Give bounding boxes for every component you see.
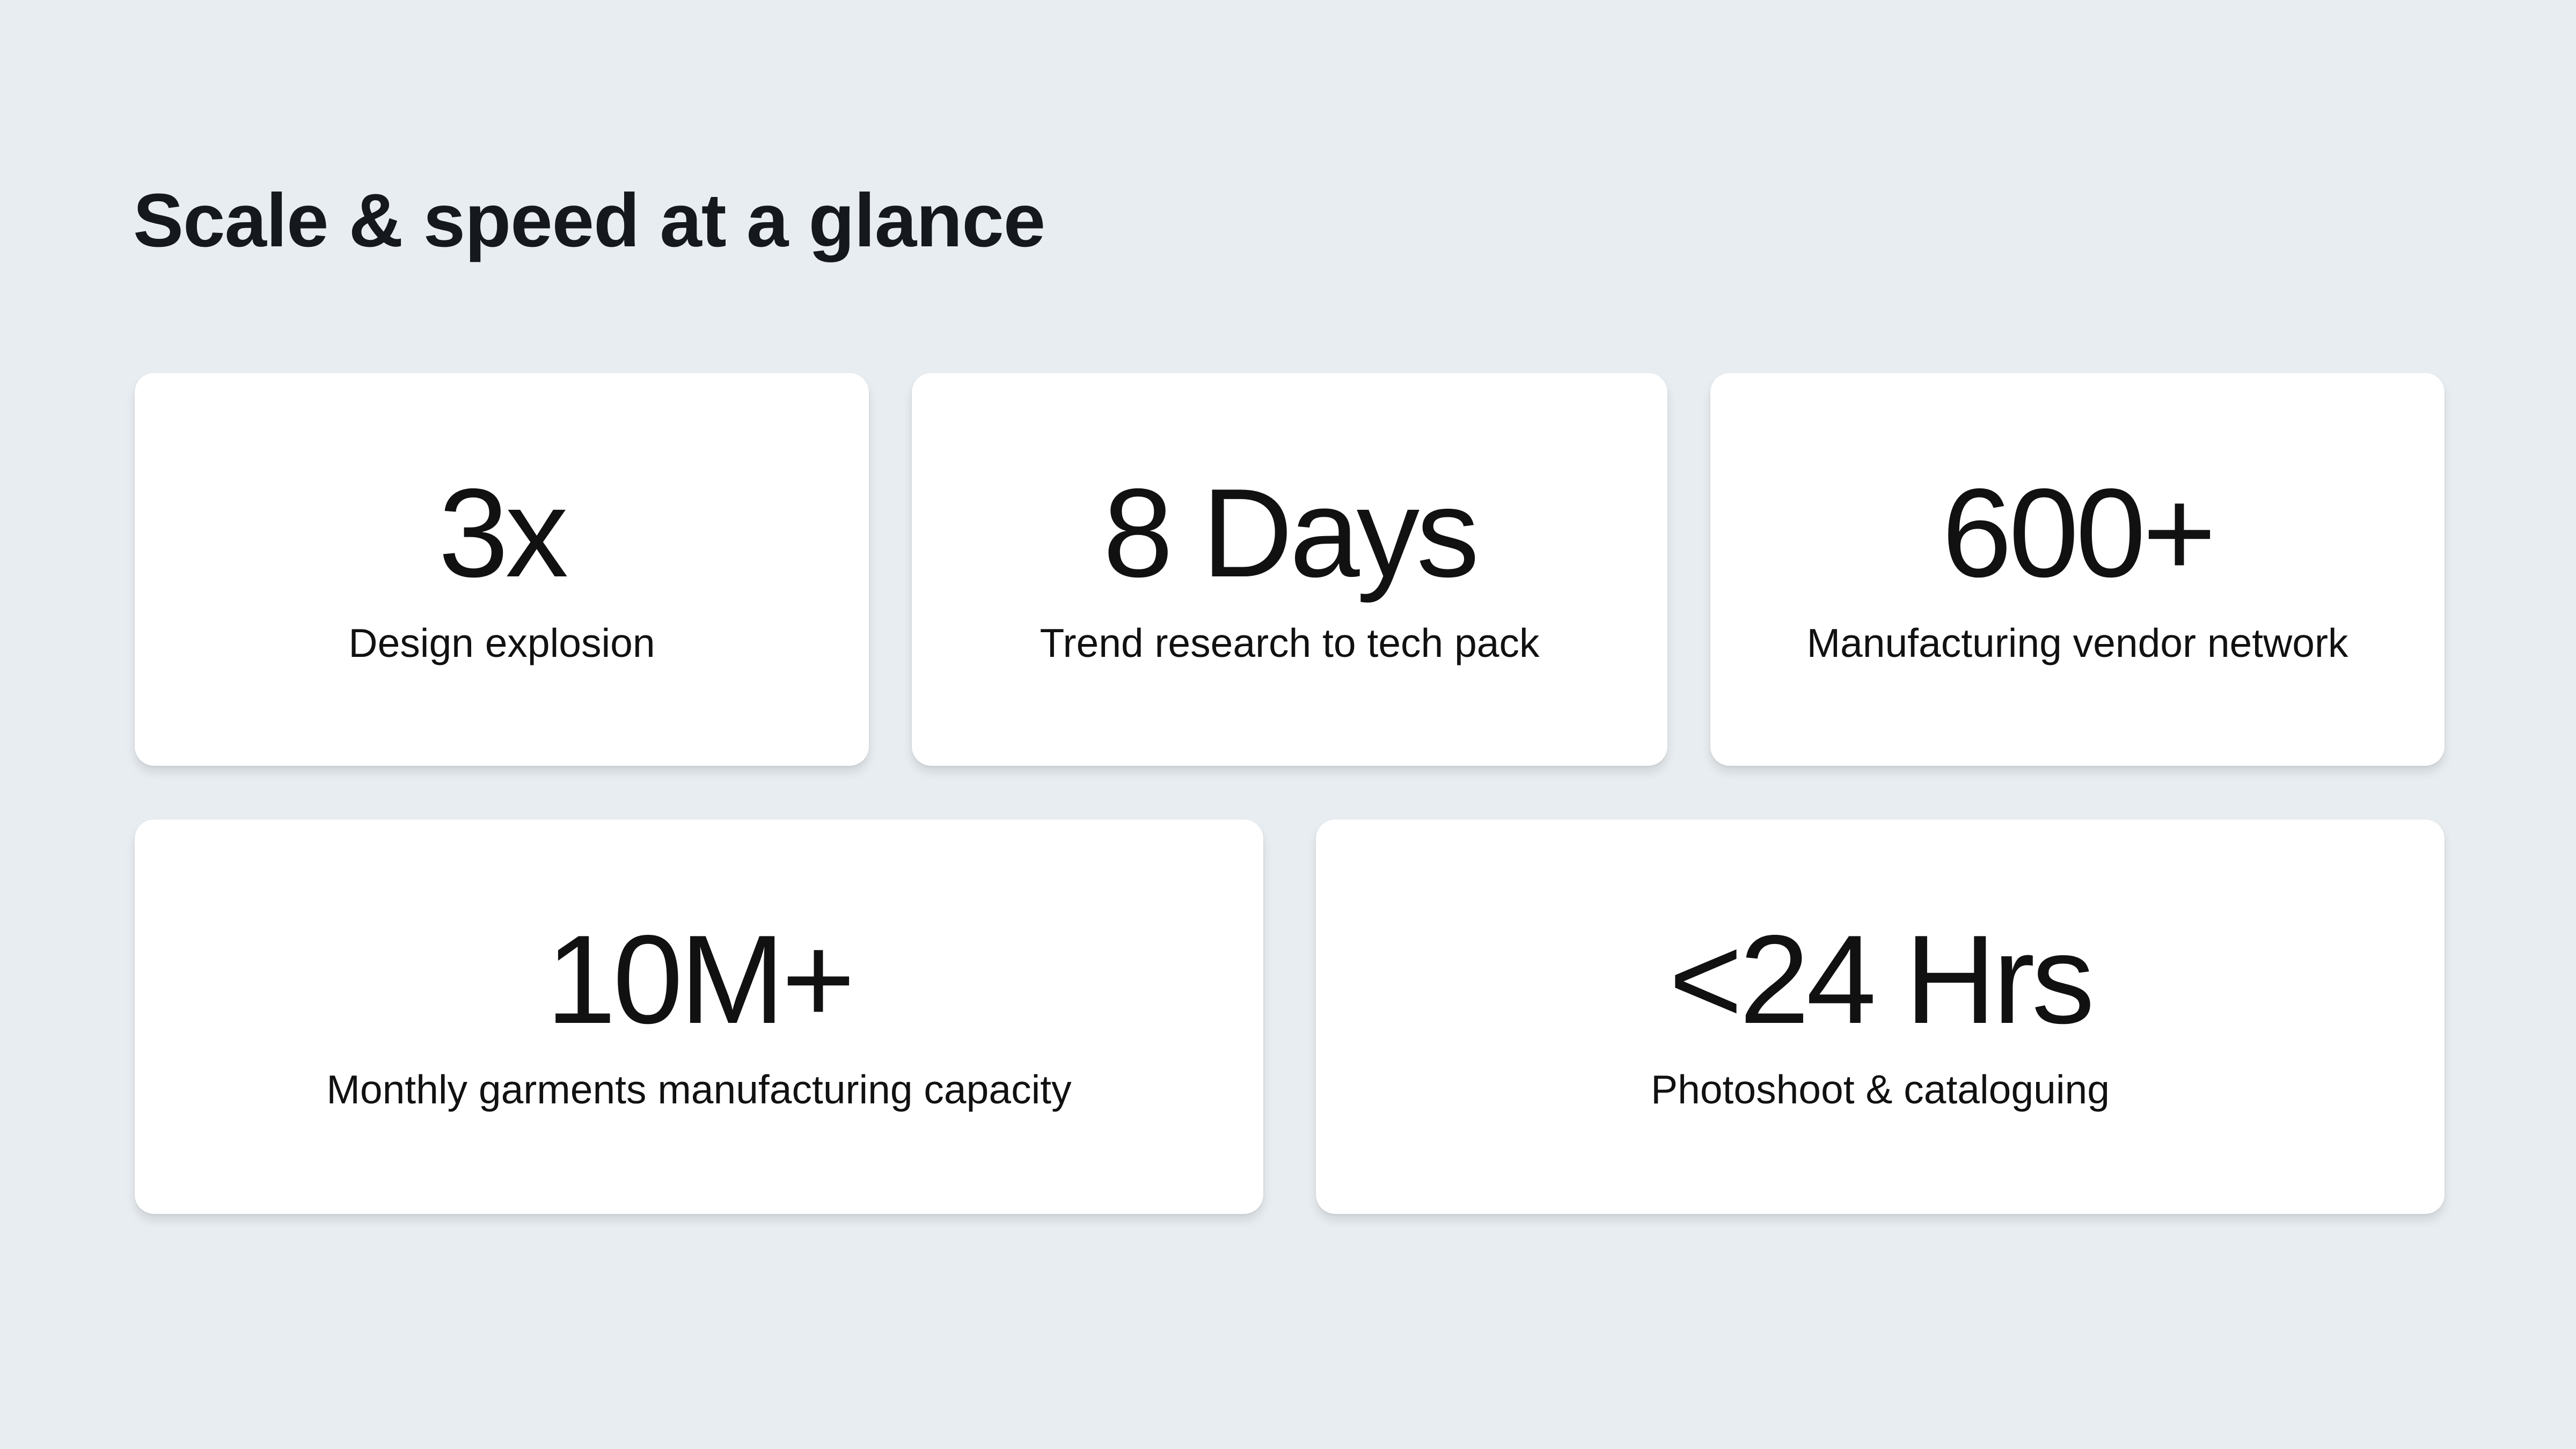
- stat number: 3x: [438, 462, 565, 603]
- stat number: 10M+: [546, 909, 852, 1050]
- card: 8 days: [912, 373, 1667, 766]
- card: 10M+: [135, 819, 1263, 1214]
- stat label: Design explosion: [348, 620, 655, 665]
- stat label: Monthly garments manufacturing capacity: [326, 1067, 1072, 1112]
- stat number: 8 Days: [1103, 462, 1476, 603]
- card: 600+: [1710, 373, 2445, 766]
- stat label: Photoshoot & cataloguing: [1651, 1067, 2110, 1112]
- card: 3x design explosion: [135, 373, 869, 766]
- stat label: Manufacturing vendor network: [1807, 620, 2348, 665]
- card: <24 hrs: [1316, 819, 2445, 1214]
- title: Scale & speed at a glance: [133, 178, 1045, 262]
- stat label: Trend research to tech pack: [1040, 620, 1540, 665]
- stat number: 600+: [1942, 462, 2213, 603]
- stat number: <24 Hrs: [1669, 909, 2091, 1050]
